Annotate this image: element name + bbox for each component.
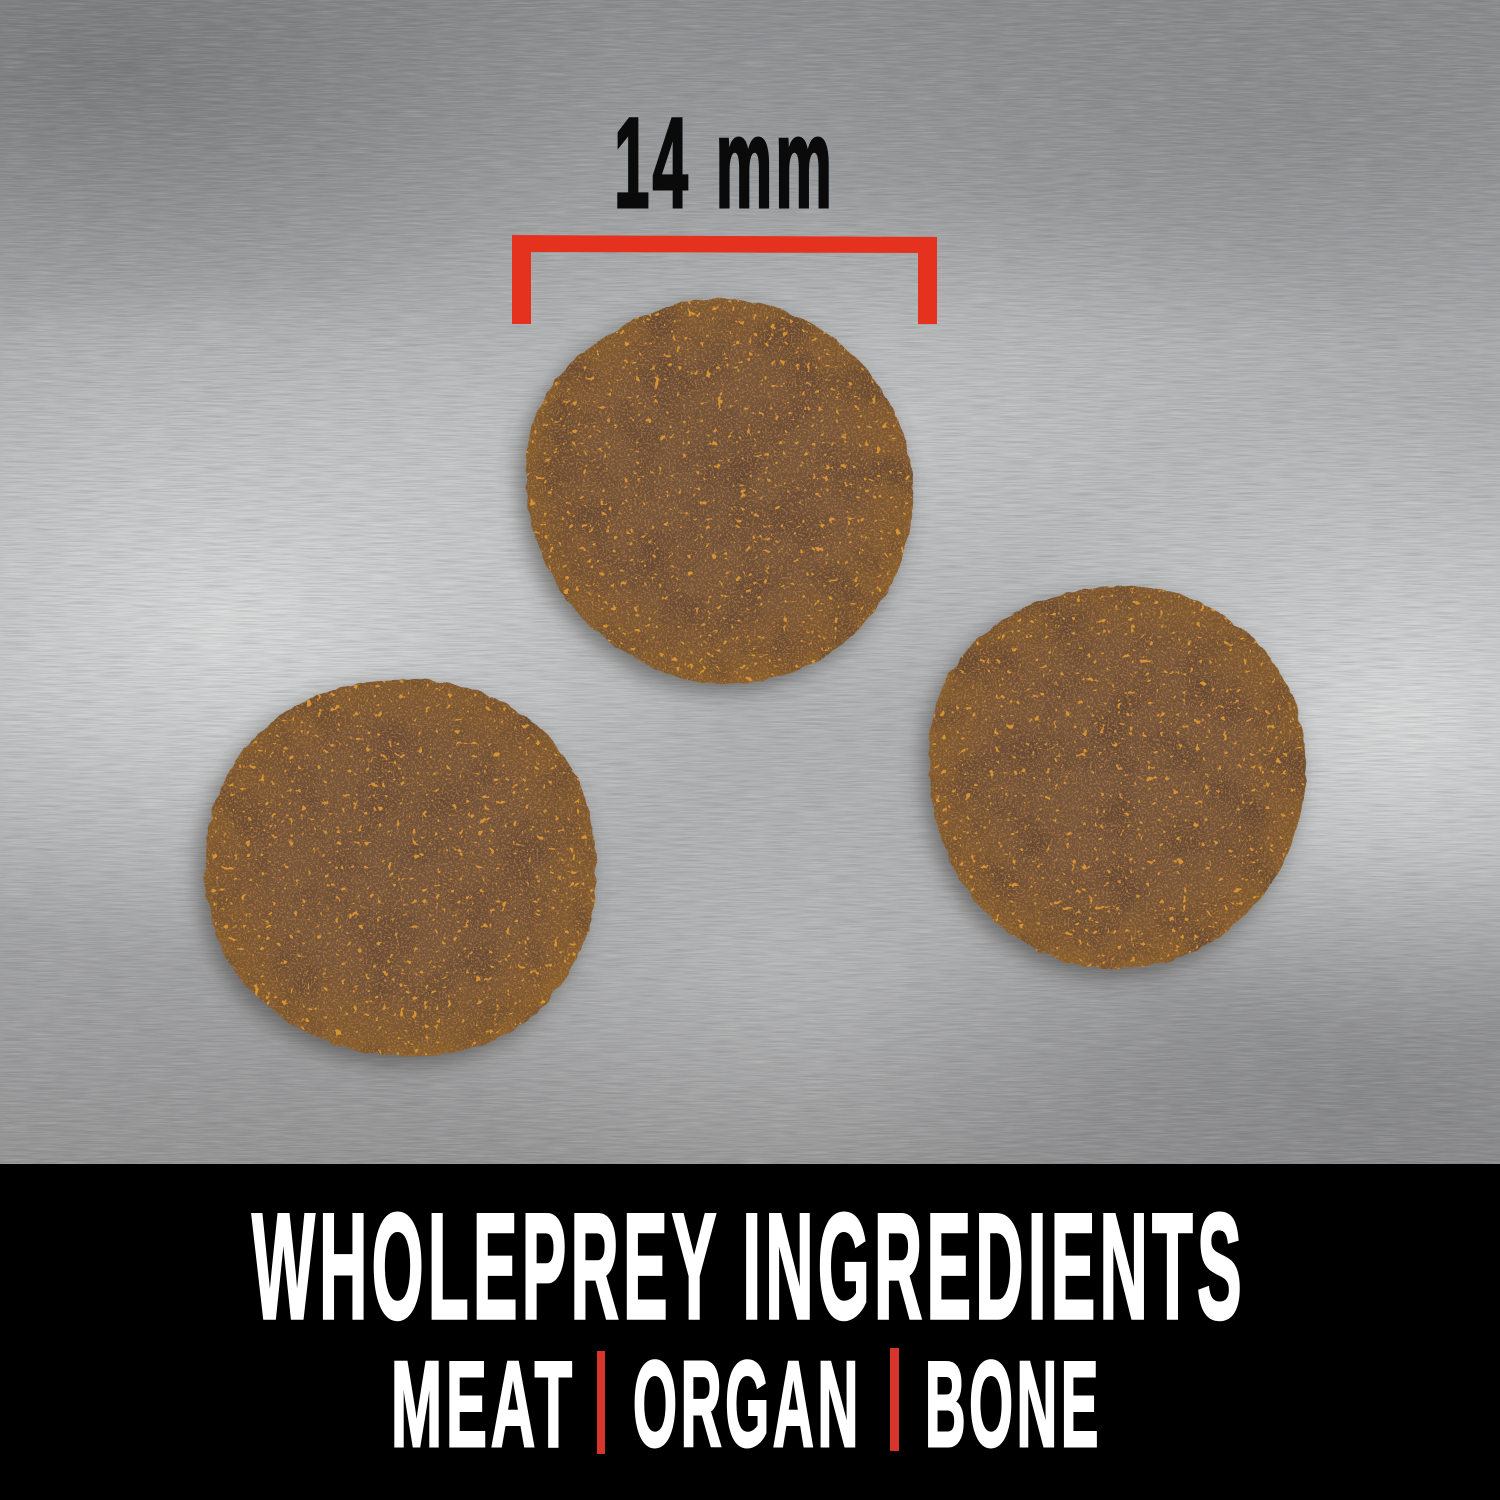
red divider 1 <box>597 1351 605 1454</box>
subheading: meat, organ, bone: ORGAN <box>633 1336 862 1472</box>
text: 14 mm <box>614 92 835 235</box>
red measurement bracket <box>512 235 937 324</box>
black caption band <box>0 1164 1500 1500</box>
kibble: lower right <box>922 586 1305 977</box>
subheading: meat, organ, bone <box>391 1336 1102 1472</box>
kibble: lower left <box>198 679 596 1064</box>
kibble: top centre <box>519 299 913 691</box>
word: meat: MEAT <box>391 1336 576 1472</box>
red divider 2 <box>890 1348 899 1451</box>
text: BONE <box>925 1336 1102 1472</box>
